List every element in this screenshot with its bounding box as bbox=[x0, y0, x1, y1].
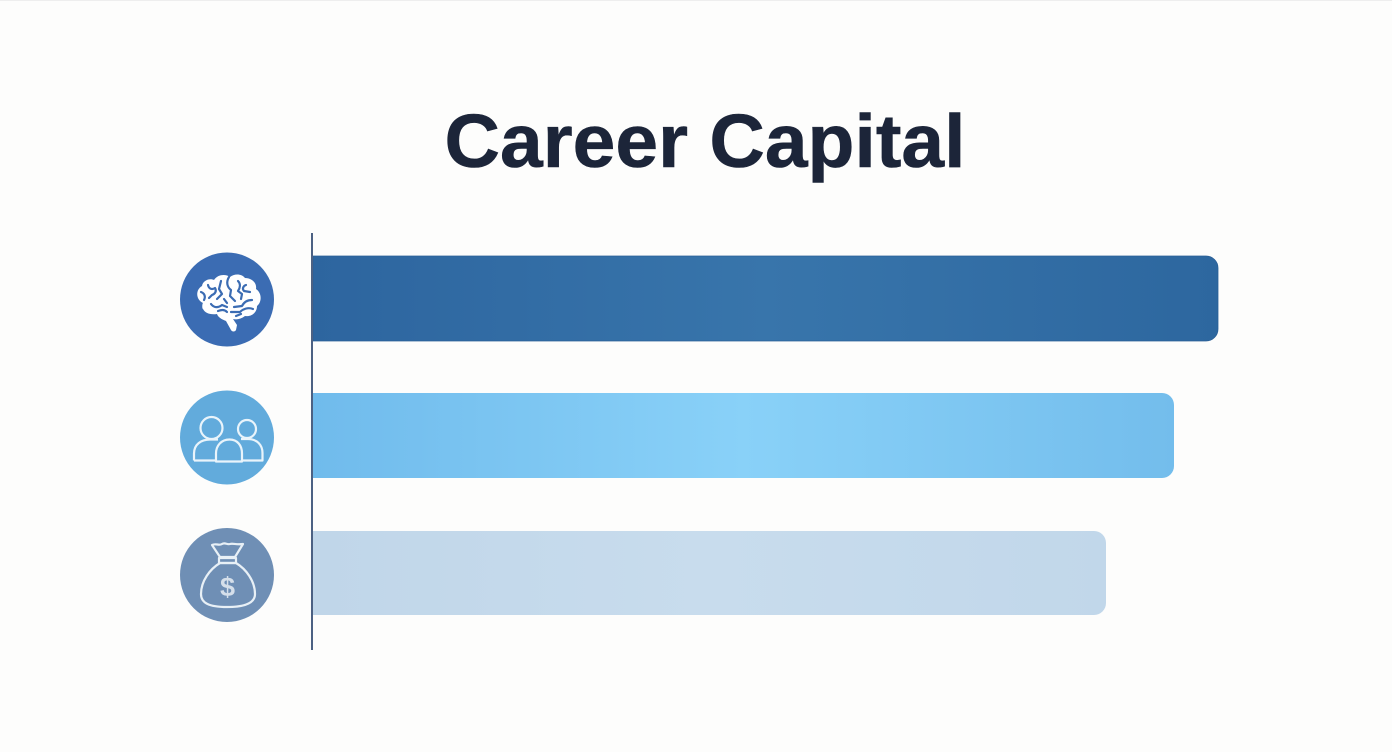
dollar sign: $ bbox=[220, 572, 235, 602]
vertical axis bbox=[311, 233, 313, 650]
title: Career Capital bbox=[444, 99, 966, 183]
icon: brain bbox=[180, 252, 274, 346]
bar: second capital, light blue bbox=[313, 393, 1174, 478]
icon: money bag bbox=[180, 528, 274, 622]
person left bbox=[200, 417, 222, 439]
person right bbox=[238, 420, 256, 438]
person centre bbox=[216, 440, 242, 462]
bar: first capital, dark blue bbox=[313, 256, 1218, 341]
icon: people bbox=[180, 390, 274, 484]
bar: third capital, pale blue bbox=[313, 531, 1106, 615]
